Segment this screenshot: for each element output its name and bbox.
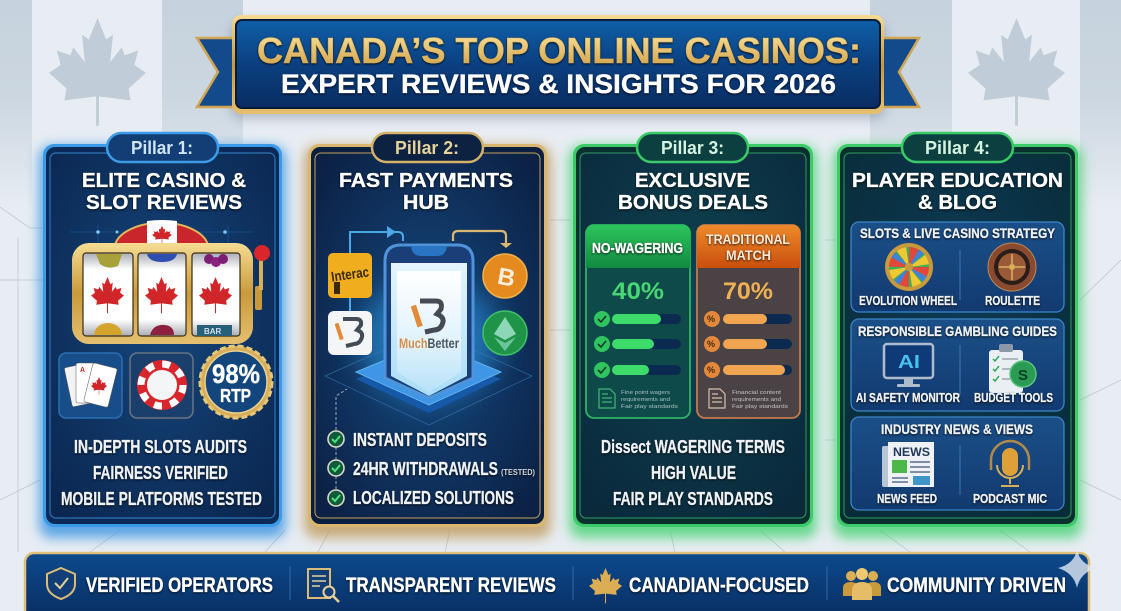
glow behind phone xyxy=(359,280,499,400)
pillar 4 heading xyxy=(852,170,1063,214)
pillar 2 heading: HUB xyxy=(403,192,449,214)
pillar 3 label xyxy=(637,133,748,162)
news labels: PODCAST MIC xyxy=(973,492,1047,506)
panel: responsible gambling xyxy=(851,319,1064,411)
70 percent: 70% xyxy=(723,278,773,305)
traditional match heading: MATCH xyxy=(726,247,771,263)
checklist xyxy=(328,430,535,508)
icon: bitcoin: B xyxy=(496,263,517,293)
pillar 1 features: FAIRNESS VERIFIED xyxy=(93,463,228,483)
icon: ethereum xyxy=(483,311,527,355)
slots strategy title: SLOTS & LIVE CASINO STRATEGY xyxy=(860,225,1056,241)
panel: pillar 1 xyxy=(39,133,286,538)
orange bars xyxy=(704,311,792,378)
pillar 4 heading: & BLOG xyxy=(918,192,997,214)
pillar 3 label: Pillar 3: xyxy=(661,138,724,158)
panel: pillar 2 xyxy=(304,133,551,538)
icon: podcast mic xyxy=(991,441,1029,486)
shadow under banner xyxy=(232,22,884,118)
canadian-focused: CANADIAN-FOCUSED xyxy=(629,574,809,597)
green bars xyxy=(594,311,681,378)
icon: AI monitor xyxy=(884,344,933,387)
news labels xyxy=(877,492,1047,506)
fine print: requirements and xyxy=(621,397,670,403)
platform under phone xyxy=(325,330,532,425)
pillar 2 heading xyxy=(339,170,513,214)
fine print: Fair play standards xyxy=(732,404,788,410)
pillar 4 label: Pillar 4: xyxy=(925,138,990,158)
no-wagering heading: NO-WAGERING xyxy=(592,241,683,257)
slots labels xyxy=(859,294,1040,308)
responsible labels: AI SAFETY MONITOR xyxy=(856,391,960,405)
icon: left maple leaf xyxy=(49,18,146,126)
icon: muchbetter app xyxy=(328,311,372,355)
icon: casino chip xyxy=(130,353,193,418)
verified operators xyxy=(47,568,273,599)
pillar 4 label xyxy=(902,133,1013,162)
industry news title: INDUSTRY NEWS & VIEWS xyxy=(881,421,1033,437)
fine print: requirements and xyxy=(732,397,781,403)
community driven: COMMUNITY DRIVEN xyxy=(887,574,1066,597)
badge: 98% RTP xyxy=(200,346,272,418)
icon: budget clipboard xyxy=(989,344,1036,393)
responsible labels: BUDGET TOOLS xyxy=(974,391,1053,405)
panel: industry news xyxy=(851,417,1064,510)
footer bar xyxy=(25,553,1089,611)
canadian-focused xyxy=(589,568,809,603)
pillar 3 features: HIGH VALUE xyxy=(651,463,736,483)
pillar 3 features xyxy=(601,437,785,509)
icon: roulette xyxy=(988,243,1036,291)
orange bars: % xyxy=(707,314,715,324)
fine print xyxy=(732,390,788,410)
traditional match heading xyxy=(706,231,790,263)
pillar 1 features: IN-DEPTH SLOTS AUDITS xyxy=(74,437,247,457)
slots labels: EVOLUTION WHEEL xyxy=(859,294,957,308)
panel: pillar 4 xyxy=(833,133,1082,538)
icon: phone xyxy=(385,245,473,398)
pillar 2 label: Pillar 2: xyxy=(395,138,459,158)
pillar 3 features: Dissect WAGERING TERMS xyxy=(601,437,785,457)
pillar 4 heading: PLAYER EDUCATION xyxy=(852,170,1063,192)
pillar 1 heading xyxy=(82,170,246,214)
pillar 1 label xyxy=(107,133,218,162)
panel: pillar 3 xyxy=(569,133,817,538)
icon: newspaper xyxy=(882,442,934,487)
pillar 2 heading: FAST PAYMENTS xyxy=(339,170,513,192)
pillar 1 features xyxy=(61,437,262,509)
muchbetter logo xyxy=(399,301,460,351)
pillar 1 features: MOBILE PLATFORMS TESTED xyxy=(61,489,262,509)
banner plate xyxy=(232,15,884,114)
icon: document xyxy=(599,389,615,408)
fine print xyxy=(621,390,678,410)
badge: 98% RTP: RTP xyxy=(220,386,251,406)
checklist: 24HR WITHDRAWALS xyxy=(353,459,498,479)
checklist: LOCALIZED SOLUTIONS xyxy=(353,488,514,508)
icon: interac: Interac xyxy=(330,263,370,285)
pillar 1 heading: ELITE CASINO & xyxy=(82,170,246,192)
icon: right maple leaf xyxy=(968,18,1065,126)
pillar 3 features: FAIR PLAY STANDARDS xyxy=(613,489,773,509)
responsible gambling title: RESPONSIBLE GAMBLING GUIDES xyxy=(858,323,1057,339)
title line 1: CANADA’S TOP ONLINE CASINOS: xyxy=(257,30,861,71)
community driven xyxy=(843,568,1066,600)
pillar 3 heading xyxy=(618,170,768,214)
icon: evolution wheel xyxy=(885,243,933,291)
muchbetter logo: MuchBetter xyxy=(399,336,460,351)
transparent reviews: TRANSPARENT REVIEWS xyxy=(346,574,556,597)
icon: AI monitor: AI xyxy=(898,352,920,372)
fine print: Fine point wagers xyxy=(621,390,670,396)
pillar 2 label xyxy=(372,133,483,162)
pillar 3 heading: EXCLUSIVE xyxy=(635,170,750,192)
pillar 1 label: Pillar 1: xyxy=(131,138,193,158)
arrow: gold flow xyxy=(453,231,512,248)
responsible labels xyxy=(856,391,1053,405)
orange bars: % xyxy=(707,365,715,375)
pillar 3 heading: BONUS DEALS xyxy=(618,192,768,214)
ribbon tail right xyxy=(880,38,919,107)
pillar 1 heading: SLOT REVIEWS xyxy=(86,192,242,214)
traditional match heading: TRADITIONAL xyxy=(706,231,790,247)
orange bars: % xyxy=(707,339,715,349)
icon: playing cards xyxy=(59,353,122,418)
icon: bitcoin xyxy=(483,254,527,298)
icon: document xyxy=(709,389,725,408)
panel: no-wagering xyxy=(586,225,690,418)
verified operators: VERIFIED OPERATORS xyxy=(86,574,273,597)
dashed connector xyxy=(336,389,347,490)
icon: newspaper: NEWS xyxy=(893,445,930,459)
slots labels: ROULETTE xyxy=(985,294,1040,308)
icon: slot machine xyxy=(70,220,270,344)
title banner xyxy=(197,15,919,118)
icon: sparkle xyxy=(1058,550,1096,588)
icon: slot machine: BAR xyxy=(204,327,222,336)
badge: 98% RTP: 98% xyxy=(212,359,260,389)
checklist: (TESTED) xyxy=(501,468,535,477)
arrow: blue flow xyxy=(350,226,403,311)
fine print: Fair play standards xyxy=(621,404,678,410)
40 percent: 40% xyxy=(612,278,664,305)
checklist: INSTANT DEPOSITS xyxy=(353,430,487,450)
title line 2: EXPERT REVIEWS & INSIGHTS FOR 2026 xyxy=(281,69,836,99)
icon: budget clipboard: S xyxy=(1018,367,1028,384)
ribbon tail left xyxy=(197,38,236,107)
panel: slots strategy xyxy=(851,222,1064,312)
icon: interac xyxy=(328,253,372,298)
panel: traditional match xyxy=(697,225,800,418)
news labels: NEWS FEED xyxy=(877,492,937,506)
transparent reviews xyxy=(308,569,556,602)
fine print: Financial content xyxy=(732,390,782,396)
icon: playing cards: A xyxy=(80,367,85,374)
